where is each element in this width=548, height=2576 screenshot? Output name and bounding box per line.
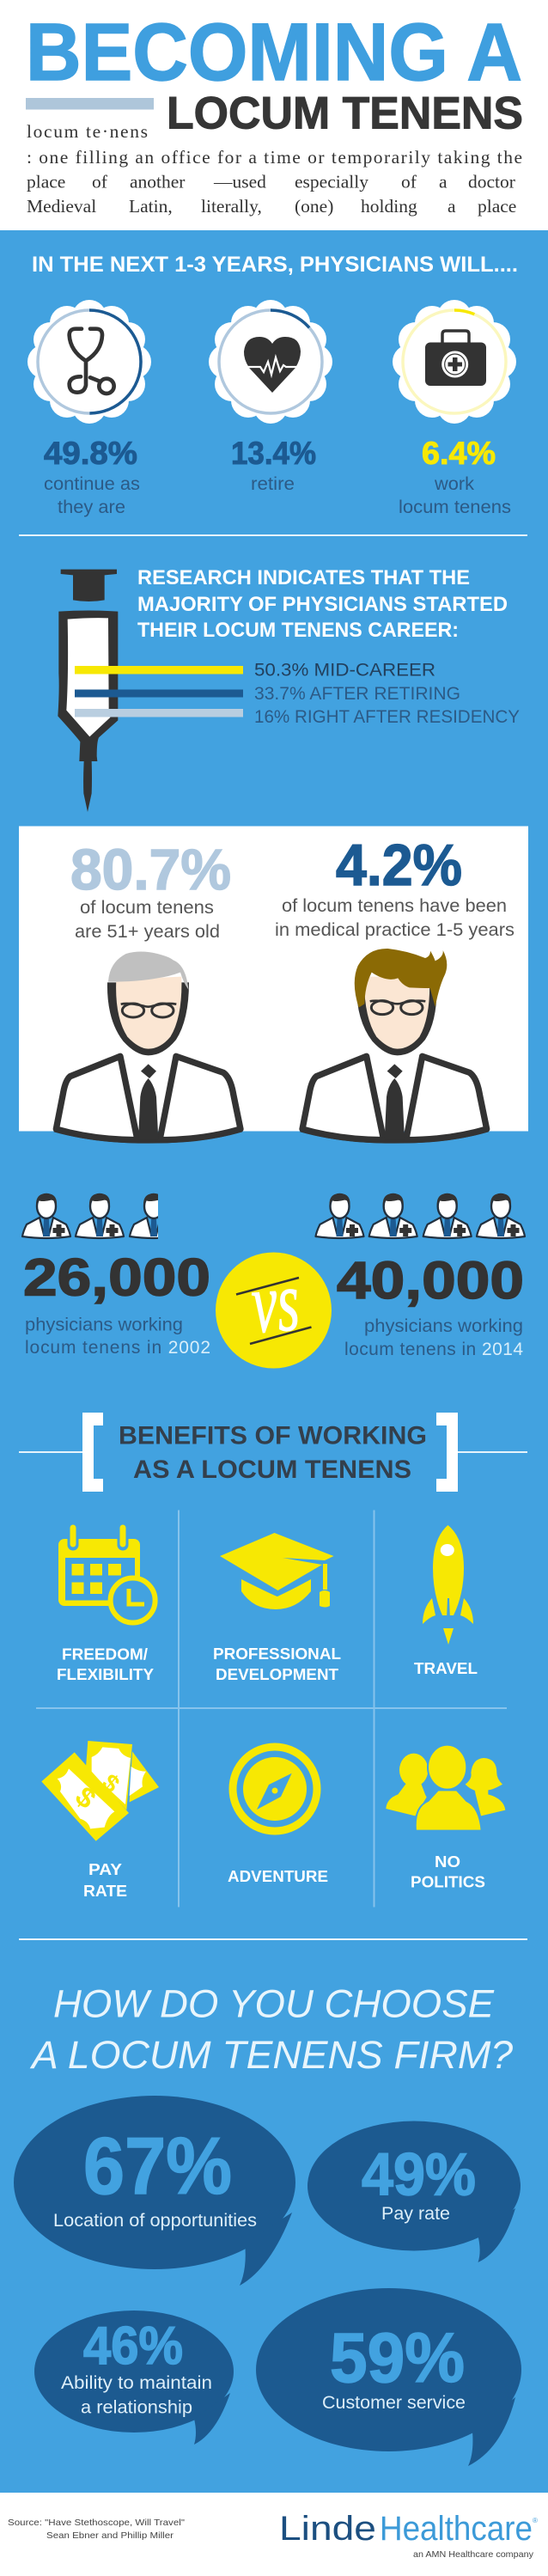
- caption: [399, 474, 511, 517]
- caption: work: [434, 474, 475, 494]
- benefit: no politics: [386, 1745, 505, 1890]
- stat: 26,000: physicians working: [25, 1315, 183, 1335]
- stat: work locum tenens: [393, 300, 516, 517]
- stat: 4.2%: 4.2%: [336, 833, 462, 898]
- grey accent bar: [26, 98, 154, 110]
- definition text: place: [478, 196, 516, 217]
- definition text: especially: [295, 172, 368, 192]
- heading: research indicates: [137, 566, 508, 642]
- heading: next 1-3 years: IN THE NEXT 1-3 YEARS, PHYSICIANS WILL....: [32, 253, 518, 277]
- stat: 40,000: 40,000: [337, 1251, 524, 1309]
- icon: older physician: [54, 951, 243, 1144]
- heading: benefits: BENEFITS OF WORKING: [119, 1421, 427, 1450]
- stat: 26,000: [23, 1248, 210, 1358]
- definition text: another: [130, 172, 185, 192]
- definition text: literally,: [201, 196, 262, 217]
- bubble: 59% customer service: Customer service: [322, 2393, 466, 2413]
- icon: vs badge: [216, 1253, 332, 1368]
- label: PAY: [88, 1861, 122, 1878]
- label: TRAVEL: [414, 1660, 478, 1677]
- stat: retire: [209, 300, 332, 494]
- stat: 80.7%: 80.7%: [70, 838, 231, 902]
- icon: medical kit badge: [393, 300, 516, 424]
- benefit: adventure: [228, 1747, 328, 1885]
- stat: 4.2%: in medical practice 1-5 years: [275, 920, 515, 940]
- definition text: [27, 121, 522, 217]
- heading: research indicates: MAJORITY OF PHYSICIANS STARTED: [137, 593, 508, 616]
- caption: locum tenens: [399, 497, 511, 517]
- chart: career stage bars: 50.3% MID-CAREER: [254, 660, 435, 681]
- definition text: of: [92, 172, 108, 192]
- icon row: 2002 physicians: [22, 1193, 178, 1238]
- icon: calendar: [58, 1527, 155, 1622]
- caption: continue as: [44, 474, 140, 494]
- logo: Linde Healthcare: an AMN Healthcare company: [413, 2549, 534, 2560]
- caption: retire: [251, 474, 295, 494]
- label: [411, 1853, 485, 1890]
- bubble: 46% relationship: Ability to maintain: [61, 2373, 212, 2393]
- definition text: place: [27, 172, 65, 192]
- label: PROFESSIONAL: [213, 1645, 341, 1663]
- definition text: a: [439, 172, 448, 192]
- stat: 80.7%: of locum tenens: [80, 898, 214, 918]
- bubble: 49% pay rate: 49%: [362, 2141, 476, 2208]
- label: [83, 1861, 127, 1900]
- source note: [8, 2518, 185, 2541]
- definition text: : one filling an office for a time or temporarily taking the: [27, 147, 522, 168]
- heading: how do you choose: A LOCUM TENENS FIRM?: [29, 2033, 513, 2077]
- source note: Sean Ebner and Phillip Miller: [46, 2530, 174, 2541]
- caption: they are: [58, 497, 125, 517]
- label: DEVELOPMENT: [216, 1666, 338, 1683]
- title: locum tenens: LOCUM TENENS: [167, 88, 523, 139]
- stat: 80.7%: are 51+ years old: [75, 922, 220, 942]
- logo: Linde Healthcare: ®: [533, 2517, 538, 2524]
- icon: syringe: [58, 570, 118, 812]
- value 6.4%: 6.4%: [422, 436, 496, 471]
- label: [57, 1646, 154, 1683]
- definition text: doctor: [468, 172, 515, 192]
- definition text: locum te·nens: [27, 121, 148, 142]
- heading: benefits: AS A LOCUM TENENS: [133, 1456, 411, 1484]
- definition text: a: [448, 196, 456, 217]
- value 13.4%: 13.4%: [231, 436, 316, 471]
- chart: career stage bars: [75, 660, 520, 727]
- heading: benefits: [19, 1413, 527, 1492]
- value 49.8%: 49.8%: [44, 436, 137, 471]
- definition text: Latin,: [129, 196, 173, 217]
- title: Becoming a: BECOMING A: [26, 7, 522, 98]
- benefit: travel: [414, 1525, 478, 1677]
- label: FREEDOM/: [62, 1646, 148, 1663]
- stat: 80.7%: [70, 838, 231, 942]
- panel: age and experience: [19, 827, 528, 1131]
- icon: money: $: [69, 1780, 102, 1816]
- bubble: 67% location: Location of opportunities: [53, 2211, 257, 2231]
- benefit: professional development: [213, 1533, 341, 1683]
- icon: compass: [233, 1747, 317, 1831]
- heading: research indicates: THEIR LOCUM TENENS CAREER:: [137, 619, 459, 642]
- label: FLEXIBILITY: [57, 1666, 154, 1683]
- icon: stethoscope badge: [27, 300, 151, 424]
- caption: [44, 474, 140, 517]
- source note: Source: "Have Stethoscope, Will Travel": [8, 2518, 185, 2528]
- bubble: 46% relationship: 46%: [83, 2317, 183, 2376]
- label: NO: [435, 1853, 460, 1871]
- stat: 40,000: [337, 1251, 524, 1359]
- logo: Linde Healthcare: [279, 2510, 538, 2560]
- stat: 40,000: physicians working: [364, 1316, 523, 1336]
- icon: younger physician: [300, 949, 490, 1144]
- bubble: 59% customer service: 59%: [330, 2319, 465, 2397]
- bubble: 67% location: 67%: [83, 2121, 232, 2211]
- icon: vs badge: vs: [248, 1253, 302, 1352]
- bubble: 46% relationship: [34, 2310, 234, 2445]
- icon: rocket: [423, 1525, 473, 1645]
- icon: heart badge: [209, 300, 332, 424]
- definition text: (one): [295, 196, 333, 217]
- label: [213, 1645, 341, 1683]
- benefit: freedom: [57, 1527, 155, 1683]
- logo: Linde Healthcare: Linde: [279, 2510, 376, 2548]
- chart: career stage bars: 16% RIGHT AFTER RESIDENCY: [254, 706, 520, 727]
- logo: Linde Healthcare: Healthcare: [380, 2510, 533, 2548]
- stat: 4.2%: [275, 833, 515, 940]
- definition text: of: [401, 172, 417, 192]
- heading: how do you choose: HOW DO YOU CHOOSE: [53, 1981, 495, 2026]
- icon: money: $: [96, 1768, 125, 1798]
- label: ADVENTURE: [228, 1868, 328, 1885]
- label: POLITICS: [411, 1873, 485, 1890]
- stat: 40,000: locum tenens in 2014: [344, 1340, 523, 1359]
- stat: continue as they are: [27, 300, 151, 517]
- label: RATE: [83, 1883, 127, 1900]
- definition text: holding: [361, 196, 417, 217]
- definition text: Medieval: [27, 196, 96, 217]
- icon row: 2014 physicians: [316, 1193, 525, 1238]
- bubble: 49% pay rate: [307, 2121, 521, 2262]
- chart: career stage bars: 33.7% AFTER RETIRING: [254, 683, 460, 704]
- icon: money: [41, 1741, 159, 1841]
- icon: people: [386, 1745, 505, 1831]
- heading: research indicates: RESEARCH INDICATES THAT THE: [137, 566, 470, 589]
- bubble: 59% customer service: [256, 2288, 521, 2466]
- stat: 4.2%: of locum tenens have been: [282, 896, 507, 916]
- bubble: 49% pay rate: Pay rate: [381, 2204, 450, 2224]
- benefit: pay rate: [41, 1741, 159, 1900]
- bubble: 46% relationship: a relationship: [81, 2397, 192, 2418]
- stat: 26,000: 26,000: [23, 1248, 210, 1306]
- bubble: 67% location: [14, 2096, 295, 2286]
- heading: how do you choose: [29, 1981, 513, 2077]
- stat: 26,000: locum tenens in 2002: [25, 1338, 210, 1358]
- icon: graduation cap: [220, 1533, 333, 1609]
- definition text: —used: [213, 172, 266, 192]
